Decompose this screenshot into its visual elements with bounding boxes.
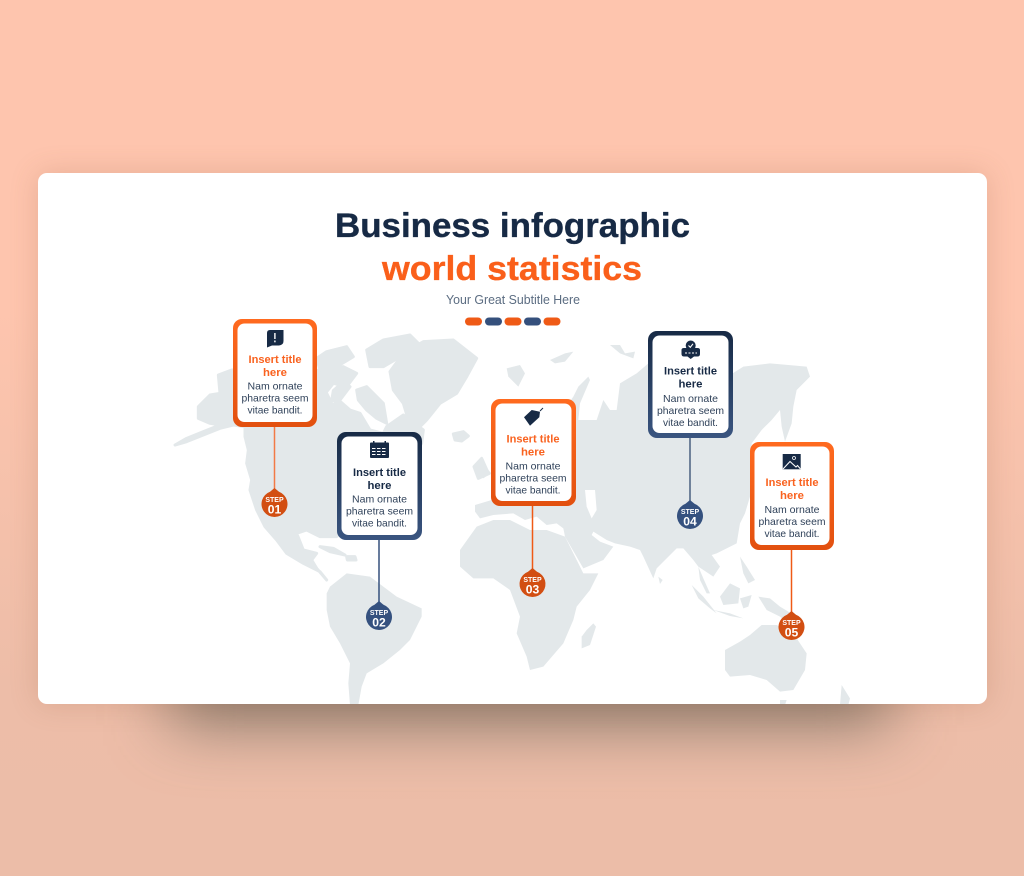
title: Business infographic (335, 207, 690, 245)
slide panel (38, 173, 987, 704)
shadow under slide (170, 630, 890, 725)
world map (175, 335, 850, 705)
new zealand (840, 685, 850, 705)
icon: badge (682, 340, 700, 359)
java (713, 610, 743, 618)
step 03 (491, 399, 576, 597)
step 04: here (678, 378, 702, 390)
africa (460, 520, 598, 670)
greenland (390, 340, 477, 430)
title: world statistics (381, 250, 642, 288)
icon: picture (783, 454, 801, 469)
step 05 (750, 442, 834, 640)
step 01: 01 (268, 504, 282, 516)
madagascar (582, 623, 596, 648)
step 02: Nam ornate (352, 494, 407, 506)
step 05: here (780, 490, 804, 502)
step 03: 03 (526, 584, 539, 596)
step 03: pharetra seem (500, 472, 567, 484)
step 02: vitae bandit. (352, 518, 407, 530)
step 03: Insert title (506, 434, 560, 446)
sulawesi (740, 595, 752, 608)
step 02 (337, 432, 422, 630)
decorative pills (465, 318, 560, 326)
step 04: Nam ornate (663, 393, 718, 405)
step 05: 05 (785, 628, 799, 640)
malay peninsula (698, 567, 710, 593)
arctic islets (550, 352, 573, 363)
north america (175, 335, 489, 580)
svalbard (507, 365, 525, 387)
step 05: pharetra seem (758, 516, 826, 528)
sri lanka (658, 577, 662, 584)
step 01: STEP (265, 497, 284, 504)
step 03: here (521, 446, 545, 458)
step 02: pharetra seem (346, 506, 413, 518)
step 02: here (368, 480, 392, 492)
step 05: Insert title (766, 477, 818, 489)
step 02: 02 (372, 618, 386, 630)
novaya zemlya (610, 345, 635, 358)
step 01: vitae bandit. (248, 404, 302, 416)
icon: speech bubble (267, 330, 284, 348)
borneo (720, 583, 740, 605)
tasmania (780, 700, 786, 704)
cuba and caribbean (320, 547, 345, 555)
eurasia (475, 345, 810, 578)
step 05: STEP (782, 620, 801, 627)
step 05: Nam ornate (764, 504, 820, 516)
icon: price tag (524, 408, 543, 426)
new guinea (758, 596, 790, 618)
step 04: STEP (681, 509, 699, 516)
caspian sea (585, 490, 597, 518)
step 04: 04 (683, 516, 697, 528)
subtitle: Your Great Subtitle Here (446, 293, 580, 307)
step 03: STEP (523, 577, 542, 584)
iceland (453, 432, 468, 441)
step 05: vitae bandit. (764, 528, 820, 540)
step 02: STEP (370, 610, 388, 617)
step 01 (233, 319, 317, 517)
step 04: pharetra seem (657, 405, 724, 417)
sumatra (692, 585, 717, 613)
step 01: pharetra seem (242, 392, 309, 404)
philippines (740, 557, 755, 583)
step 04 (648, 331, 733, 529)
step 01: here (263, 367, 287, 379)
australia (725, 625, 807, 692)
south america (327, 573, 422, 705)
step 04: Insert title (664, 366, 717, 378)
icon: calendar (370, 441, 389, 458)
title (335, 207, 690, 288)
step 03: Nam ornate (506, 460, 561, 472)
step 01: Nam ornate (248, 380, 303, 392)
step 04: vitae bandit. (663, 417, 718, 429)
step 01: Insert title (248, 354, 302, 366)
step 02: Insert title (353, 467, 406, 479)
uk (483, 459, 488, 478)
step 03: vitae bandit. (506, 484, 560, 496)
